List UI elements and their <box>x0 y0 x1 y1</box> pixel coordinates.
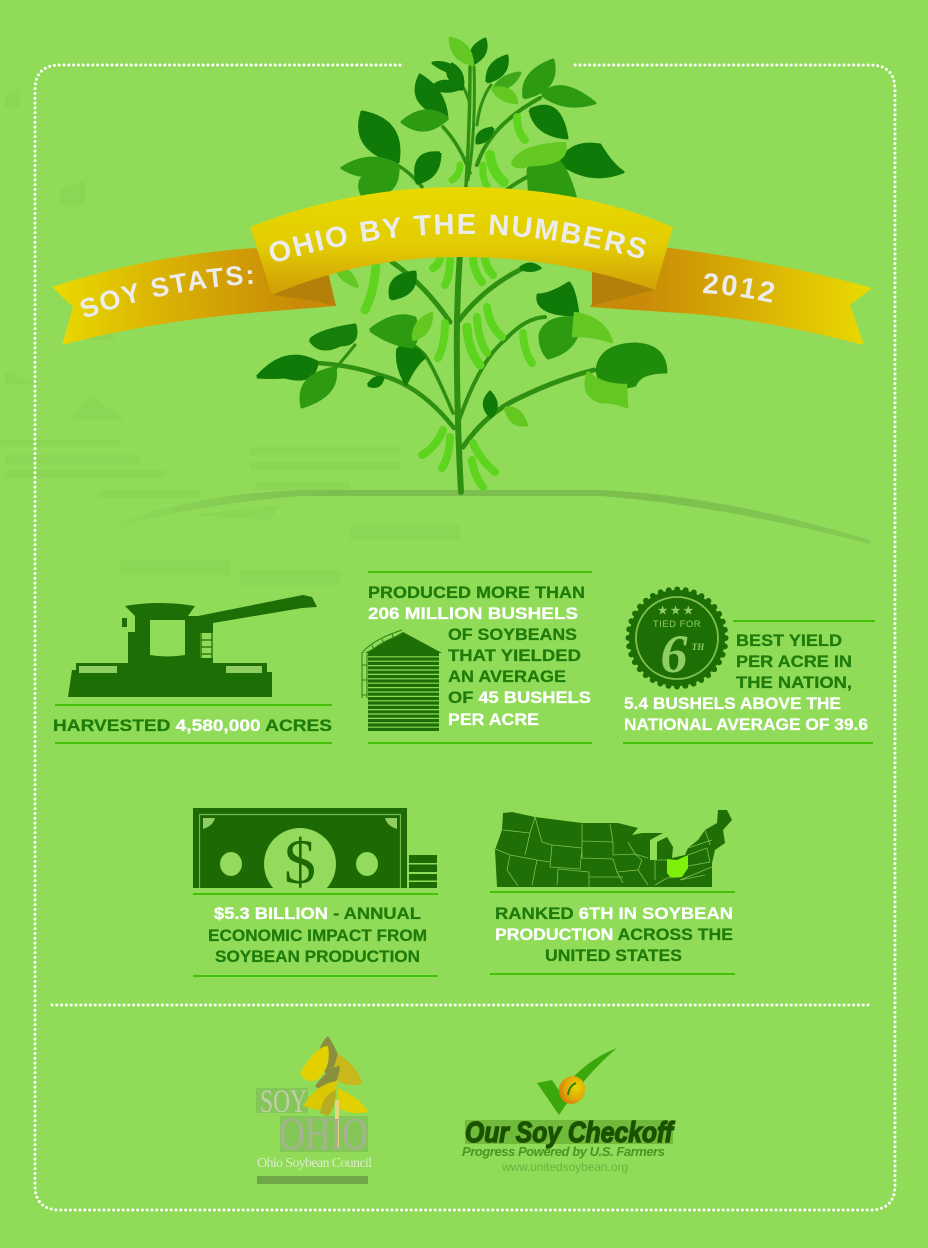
dotted divider <box>52 1004 869 1006</box>
text: bushels: THAT YIELDED <box>448 647 581 665</box>
logo url: www.unitedsoybean.org <box>501 1160 628 1174</box>
medium leaves <box>301 60 595 407</box>
icon: stack of bills <box>409 855 437 888</box>
logo wordmark: Our Soy Checkoff <box>465 1117 676 1149</box>
logo wordmark: SOY: SOY <box>260 1084 307 1120</box>
combine cab window <box>150 620 185 656</box>
text: bushels: AN AVERAGE <box>448 668 566 686</box>
text: bushels: PRODUCED MORE THAN <box>368 584 585 602</box>
icon: tied for 6th badge: TIED FOR <box>653 619 701 630</box>
text: ranking: PRODUCTION ACROSS THE <box>495 926 733 944</box>
panel: national ranking <box>490 810 735 974</box>
logo wordmark: OHIO: OHIO <box>279 1108 368 1159</box>
text: ranking: RANKED 6TH IN SOYBEAN <box>495 905 733 923</box>
icon: tied for 6th badge: TH <box>692 642 705 652</box>
panel: best yield <box>623 590 875 743</box>
logo backing tones <box>256 1088 368 1152</box>
ribbon label: 2012: 2012 <box>703 273 774 303</box>
panel: bushels produced <box>362 572 592 743</box>
ground shadow <box>100 490 870 544</box>
logo tagline strip <box>257 1176 368 1184</box>
logo: Soy Ohio <box>256 1036 372 1184</box>
light leaves <box>335 38 627 425</box>
text: bushels: OF SOYBEANS <box>448 626 577 644</box>
text: best yield: 5.4 BUSHELS ABOVE THE <box>624 695 841 713</box>
ribbon right tail <box>590 248 872 345</box>
text: bushels: OF 45 BUSHELS <box>448 689 591 707</box>
icon: tied for 6th badge: 6 <box>660 624 688 684</box>
icon: tied for 6th badge: ★★★ <box>658 605 696 617</box>
faint background texture <box>0 88 460 585</box>
icon: combine harvester <box>68 595 317 697</box>
text: ranking: UNITED STATES <box>545 947 682 965</box>
logo caption: Ohio Soybean Council <box>257 1156 372 1171</box>
icon: dollar bill: $ <box>284 826 316 897</box>
text: best yield: THE NATION, <box>736 674 852 692</box>
logo tagline: Progress Powered by U.S. Farmers <box>462 1144 665 1159</box>
text: economic impact <box>208 905 427 966</box>
ribbon banner <box>52 187 872 345</box>
icon: soybean <box>554 1072 590 1108</box>
icon: tied for 6th badge <box>628 590 726 686</box>
text: economic impact: ECONOMIC IMPACT FROM <box>208 927 427 945</box>
text: bushels <box>368 584 591 729</box>
ribbon left tail <box>52 248 336 345</box>
logo: soybean pods <box>300 1036 368 1148</box>
text: best yield: PER ACRE IN <box>736 653 852 671</box>
text: bushels: 206 MILLION BUSHELS <box>368 605 578 623</box>
ribbon label: ohio by the numbers: OHIO BY THE NUMBERS <box>270 214 646 262</box>
soybean pods <box>365 117 532 487</box>
ribbon label: soy stats: SOY STATS: <box>80 266 252 317</box>
plant stems <box>317 67 594 492</box>
text: economic impact: SOYBEAN PRODUCTION <box>215 948 420 966</box>
text: best yield <box>624 632 868 734</box>
icon: grain silo <box>362 630 442 731</box>
text: bushels: PER ACRE <box>448 711 539 729</box>
map: Ohio <box>667 855 688 877</box>
logo backing block <box>465 1120 673 1144</box>
icon: check mark <box>537 1048 617 1115</box>
ribbon main band <box>250 187 673 295</box>
panel: harvested acres <box>53 595 332 743</box>
panel: economic impact <box>193 808 438 976</box>
logo: Our Soy Checkoff <box>462 1048 676 1174</box>
text: ranking <box>495 905 733 965</box>
text: best yield: BEST YIELD <box>736 632 842 650</box>
icon: dollar bill <box>193 808 407 888</box>
soybean plant illustration <box>257 38 666 492</box>
text: harvested: HARVESTED 4,580,000 ACRES <box>53 717 332 735</box>
dark leaves <box>257 39 666 417</box>
ribbon fold shadows <box>272 272 655 306</box>
combine ladder and slots <box>79 633 262 673</box>
map: United States with Ohio highlighted <box>493 810 732 887</box>
text: best yield: NATIONAL AVERAGE OF 39.6 <box>624 716 868 734</box>
text: economic impact: $5.3 BILLION - ANNUAL <box>214 905 421 923</box>
